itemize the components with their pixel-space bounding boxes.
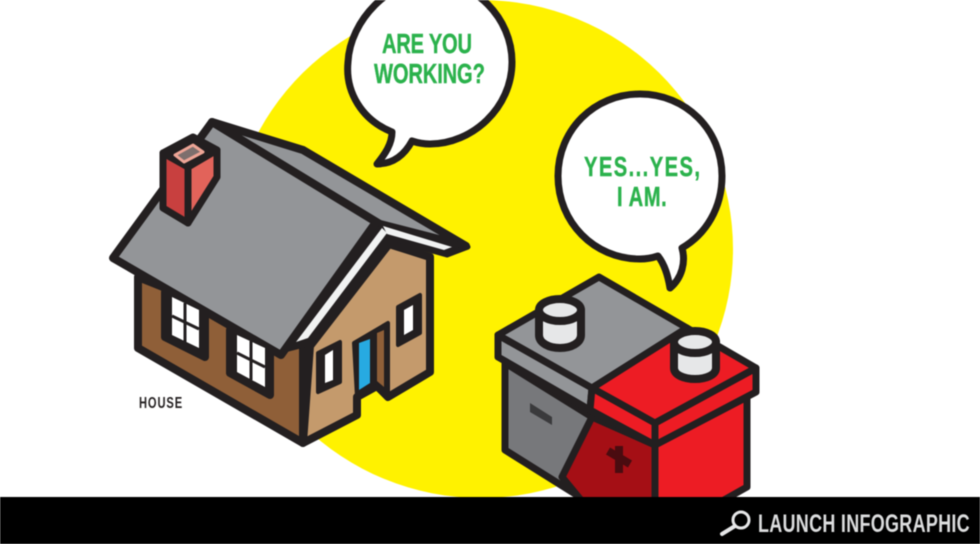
red lip bbox=[590, 368, 756, 445]
white fascia backing bbox=[283, 222, 389, 353]
gray negative body bbox=[505, 363, 600, 497]
white eave trim bbox=[383, 226, 452, 250]
answer text: YES...YES, bbox=[584, 152, 700, 183]
speech bubble: are you working bbox=[348, 0, 512, 164]
gray top bbox=[498, 277, 687, 388]
left window A bbox=[165, 292, 205, 357]
question text: WORKING? bbox=[374, 59, 485, 90]
right wall window 2 bbox=[398, 295, 420, 345]
positive terminal bbox=[674, 331, 716, 379]
speech bubble: yes I am bbox=[558, 94, 722, 288]
right wall window 1 bbox=[318, 342, 340, 392]
battery bbox=[498, 277, 756, 505]
red front side bbox=[655, 397, 747, 505]
launch infographic label: LAUNCH INFOGRAPHIC bbox=[758, 509, 970, 538]
door bbox=[354, 323, 388, 397]
plus sign bbox=[608, 446, 630, 473]
answer text: I AM. bbox=[617, 182, 667, 213]
negative terminal bbox=[539, 299, 581, 348]
house bbox=[113, 122, 468, 443]
house label: HOUSE bbox=[139, 394, 182, 411]
dark red side bbox=[562, 417, 655, 505]
main roof slope bbox=[113, 122, 376, 355]
bottom black bar bbox=[0, 497, 980, 544]
icon: magnifying glass bbox=[722, 512, 749, 534]
question text bbox=[374, 29, 485, 90]
back roof slope bbox=[212, 122, 466, 246]
gray lip bbox=[498, 335, 592, 410]
red top bbox=[592, 328, 756, 423]
yellow background circle bbox=[229, 0, 733, 498]
white fascia trim bbox=[296, 228, 387, 342]
minus sign bbox=[530, 403, 552, 425]
question text: ARE YOU bbox=[382, 29, 472, 60]
right tan wall bbox=[303, 244, 430, 443]
left window B bbox=[230, 330, 270, 395]
eave tip bbox=[378, 222, 468, 255]
answer text bbox=[584, 152, 700, 213]
left brown wall bbox=[138, 277, 303, 443]
chimney bbox=[163, 137, 217, 223]
